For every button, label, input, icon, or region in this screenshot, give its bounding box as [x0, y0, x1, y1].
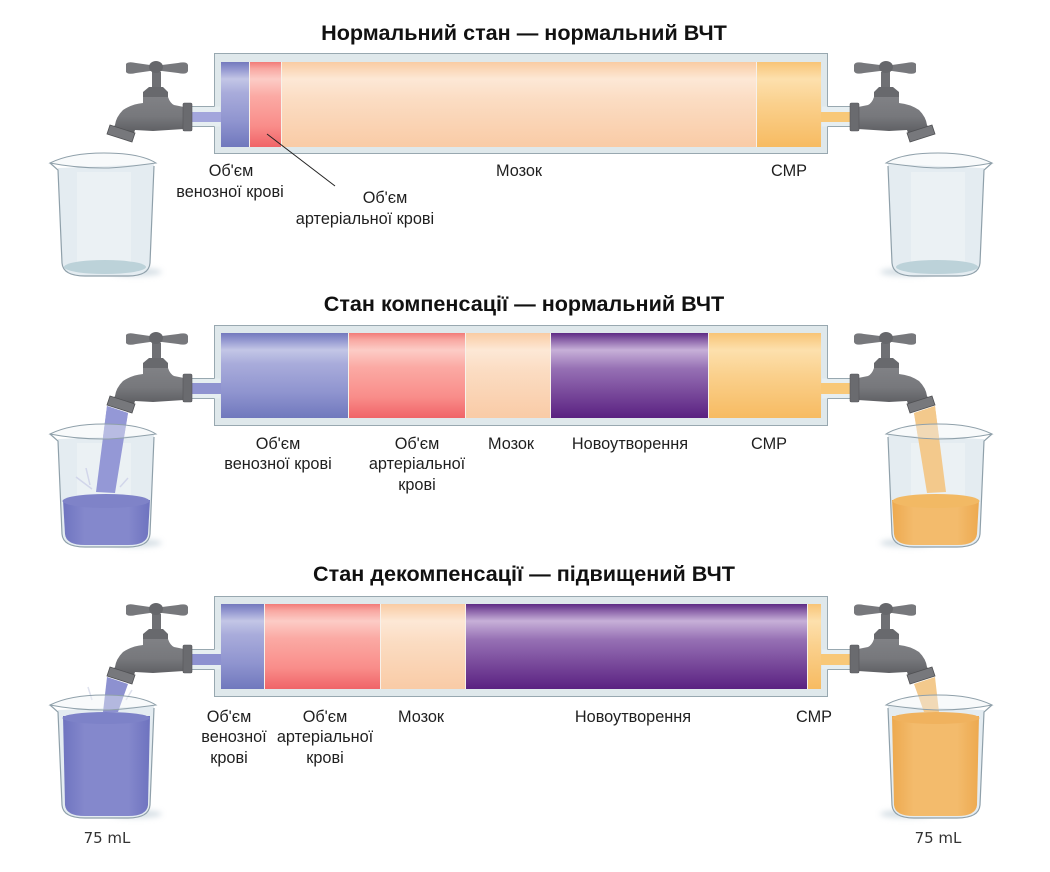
title: compensation state: Стан компенсації — нормальний ВЧТ	[324, 291, 724, 316]
icon: left beaker, partly filled	[50, 406, 162, 547]
icon: left beaker, empty	[50, 153, 162, 276]
label: venous volume: венозної крові	[176, 183, 284, 201]
icon: right beaker, partly filled	[880, 406, 992, 547]
label: venous volume: Об'єм	[256, 435, 300, 453]
panel: compensation state	[50, 291, 992, 547]
icon: left faucet with venous outflow	[107, 603, 192, 684]
leader line: arterial volume	[267, 134, 335, 186]
tube: decompensation state	[188, 596, 854, 696]
icon: right faucet with CSF outflow	[850, 603, 935, 684]
tube: compensation state	[188, 326, 854, 426]
label: venous volume: крові	[210, 749, 248, 767]
label: venous volume: Об'єм	[207, 708, 251, 726]
label: right volume 75 mL: 75 mL	[915, 829, 962, 847]
label: venous volume: Об'єм	[209, 162, 253, 180]
label: left volume 75 mL: 75 mL	[84, 829, 131, 847]
label: arterial volume: артеріальної крові	[296, 210, 434, 228]
icon: right faucet	[850, 61, 935, 142]
icon: left beaker, full	[50, 677, 162, 818]
label: neoplasm: Новоутворення	[572, 435, 688, 453]
label: arterial volume: артеріальної	[369, 455, 466, 473]
icon: right faucet with CSF outflow	[850, 332, 946, 493]
label: venous volume: венозної	[201, 728, 267, 746]
label: arterial volume: Об'єм	[395, 435, 439, 453]
title: normal state: Нормальний стан — нормальний ВЧТ	[321, 20, 727, 45]
label: brain: Мозок	[496, 162, 543, 180]
label: brain: Мозок	[488, 435, 535, 453]
label: neoplasm: Новоутворення	[575, 708, 691, 726]
label: brain: Мозок	[398, 708, 445, 726]
icon: left faucet	[107, 61, 192, 142]
label: arterial volume: Об'єм	[303, 708, 347, 726]
panel: decompensation state	[50, 561, 992, 847]
label: venous volume: венозної крові	[224, 455, 332, 473]
title: decompensation state: Стан декомпенсації — підвищений ВЧТ	[313, 561, 735, 586]
label: CSF: СМР	[771, 162, 807, 180]
label: arterial volume: артеріальної	[277, 728, 374, 746]
label: arterial volume: Об'єм	[363, 189, 407, 207]
label: arterial volume: крові	[306, 749, 344, 767]
icon: right beaker, empty	[880, 153, 992, 276]
icon: right beaker, full	[880, 677, 992, 818]
label: CSF: СМР	[751, 435, 787, 453]
label: CSF: СМР	[796, 708, 832, 726]
label: arterial volume: крові	[398, 476, 436, 494]
icon: left faucet with venous outflow	[96, 332, 192, 493]
panel: normal state	[50, 20, 992, 276]
tube: normal state	[188, 54, 854, 154]
